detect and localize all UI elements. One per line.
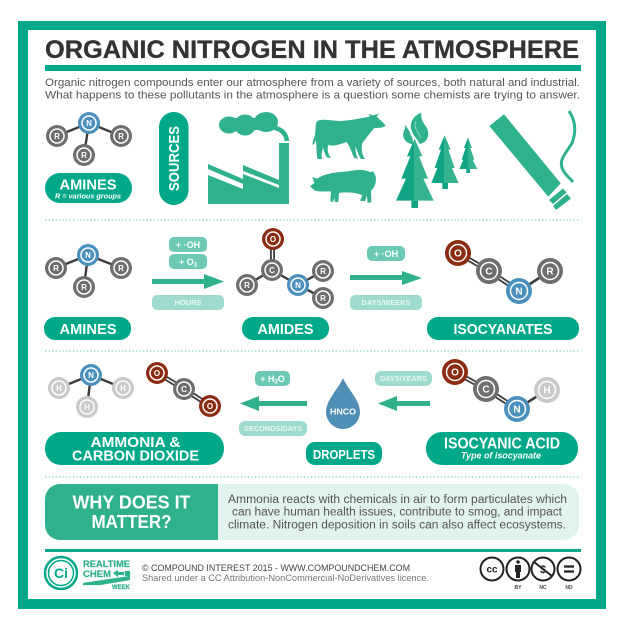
panel: why does it matter: Ammonia reacts with chemicals in air to form particulates which	[228, 494, 567, 506]
intro text	[45, 77, 580, 102]
reaction step: droplets to ammonia: SECONDS/DAYS	[244, 424, 302, 433]
reaction step: droplets to ammonia	[239, 371, 307, 436]
molecule: isocyanate: R	[546, 266, 554, 278]
label: isocyanates	[427, 317, 579, 340]
icon: factory	[208, 112, 289, 204]
reaction step: amines to amides: + O	[179, 257, 194, 267]
molecule: ammonia: N	[88, 371, 94, 380]
molecule: ammonia: H	[84, 403, 90, 412]
label: isocyanic acid	[426, 432, 578, 465]
panel: why does it matter: WHY DOES IT	[72, 492, 191, 512]
molecule: isocyanate: O	[454, 248, 462, 260]
label: isocyanic acid: ISOCYANIC ACID	[444, 436, 560, 452]
footer credit text	[142, 563, 429, 583]
intro text: What happens to these pollutants in the atmosphere is a question some chemists are trying to answer.	[45, 90, 580, 102]
label: droplets: DROPLETS	[313, 448, 375, 462]
molecule: isocyanic acid: C	[482, 384, 490, 396]
label: isocyanates: ISOCYANATES	[454, 321, 552, 338]
icons: creative commons licence: cc	[486, 564, 498, 576]
label: sources: SOURCES	[166, 126, 183, 191]
icon: burning trees	[396, 113, 477, 208]
icon: pig	[310, 170, 376, 203]
molecule: amine (reaction row)	[45, 244, 132, 298]
molecule: isocyanate: C	[485, 266, 493, 278]
footer credit text: © COMPOUND INTEREST 2015 - WWW.COMPOUNDCHEM.COM	[142, 563, 410, 573]
reaction step: amides to isocyanates: DAYS/WEEKS	[362, 298, 410, 307]
icon: HNCO droplet: HNCO	[330, 408, 356, 416]
logo: realtime chem week: REALTIME	[83, 559, 130, 569]
title underline	[45, 65, 581, 71]
molecule: amine with R groups (sources row): R	[54, 132, 60, 141]
molecule: ammonia: H	[56, 384, 62, 393]
molecule: amine with R groups (sources row): N	[86, 119, 92, 128]
label: droplets	[306, 442, 382, 465]
panel: why does it matter: can have human health issues, contribute to smog, and impact	[232, 506, 563, 518]
reaction step: droplets to ammonia: + H	[260, 374, 274, 384]
reaction step: amides to isocyanates: + ·OH	[374, 249, 398, 259]
label: ammonia and carbon dioxide: CARBON DIOXIDE	[72, 448, 199, 464]
logo: compound interest	[45, 557, 77, 589]
icon: cigarette	[489, 111, 575, 210]
molecule: amide: R	[320, 267, 326, 276]
molecule: amide: O	[270, 235, 276, 244]
molecule: ammonia: H	[120, 384, 126, 393]
label: sources	[159, 112, 188, 205]
molecule: isocyanic acid: N	[513, 404, 521, 416]
label: isocyanic acid: Type of isocyanate	[461, 450, 541, 460]
label: amines with note: R = various groups	[55, 192, 121, 200]
molecule: isocyanic acid: H	[543, 386, 551, 396]
molecule: carbon dioxide: O	[154, 369, 160, 378]
label: amides	[242, 317, 329, 340]
icons: creative commons licence: NC	[539, 585, 547, 591]
reaction step: isocyanic acid to droplets: DAYS/YEARS	[380, 374, 427, 383]
footer divider	[45, 549, 581, 552]
reaction step: droplets to ammonia: 2	[274, 380, 278, 386]
reaction step: amines to amides: HOURS	[174, 298, 202, 307]
reaction step: amides to isocyanates	[350, 246, 422, 310]
molecule: amide: N	[295, 281, 301, 290]
molecule: isocyanic acid	[442, 359, 560, 422]
molecule: isocyanic acid: O	[451, 368, 459, 378]
molecule: carbon dioxide	[146, 362, 221, 417]
molecule: amine (reaction row): R	[81, 283, 87, 292]
molecule: carbon dioxide: O	[207, 402, 213, 411]
panel: why does it matter: MATTER?	[92, 511, 172, 532]
logo: realtime chem week: WEEK	[112, 585, 131, 591]
molecule: amide: C	[269, 266, 275, 275]
reaction step: droplets to ammonia: O	[278, 374, 285, 384]
molecule: isocyanate	[445, 240, 563, 304]
footer credit text: Shared under a CC Attribution-NonCommercial-NoDerivatives licence.	[142, 573, 429, 583]
title: ORGANIC NITROGEN IN THE ATMOSPHERE	[45, 36, 579, 64]
icons: creative commons licence: BY	[515, 585, 522, 591]
molecule: amine with R groups (sources row): R	[81, 151, 87, 160]
icons: creative commons licence: ND	[565, 585, 573, 591]
molecule: amine (reaction row): R	[118, 264, 124, 273]
icons: creative commons licence: $	[540, 564, 546, 576]
logo: compound interest: Ci	[54, 565, 68, 581]
molecule: amide: R	[320, 294, 326, 303]
icon: HNCO droplet	[326, 378, 360, 429]
molecule: amine with R groups (sources row)	[46, 112, 132, 166]
molecule: amine (reaction row): R	[53, 264, 59, 273]
label: amines with note	[45, 173, 132, 203]
reaction step: amines to amides	[152, 237, 224, 310]
label: amides: AMIDES	[258, 321, 314, 338]
molecule: amide	[236, 228, 334, 309]
icons: creative commons licence	[480, 558, 580, 591]
label: amines	[44, 317, 131, 340]
panel: why does it matter	[45, 484, 579, 540]
icon: cow	[313, 114, 386, 159]
intro text: Organic nitrogen compounds enter our atmosphere from a variety of sources, both natural and industrial.	[45, 77, 580, 89]
label: ammonia and carbon dioxide	[45, 432, 224, 465]
molecule: amide: R	[244, 281, 250, 290]
label: amines: AMINES	[60, 321, 116, 338]
label: amines with note: AMINES	[60, 176, 116, 194]
logo: realtime chem week: CHEM	[83, 569, 111, 579]
molecule: amine (reaction row): N	[85, 251, 91, 260]
reaction step: amines to amides: 3	[194, 262, 198, 268]
molecule: ammonia	[48, 364, 134, 418]
molecule: amine with R groups (sources row): R	[118, 132, 124, 141]
molecule: isocyanate: N	[515, 286, 523, 298]
label: ammonia and carbon dioxide: AMMONIA &	[90, 434, 181, 451]
panel: why does it matter: climate. Nitrogen deposition in soils can also affect ecosystems.	[228, 520, 566, 532]
logo: realtime chem week	[83, 559, 131, 591]
molecule: carbon dioxide: C	[181, 385, 187, 394]
reaction step: amines to amides: + ·OH	[176, 240, 200, 250]
reaction step: isocyanic acid to droplets	[375, 371, 432, 411]
